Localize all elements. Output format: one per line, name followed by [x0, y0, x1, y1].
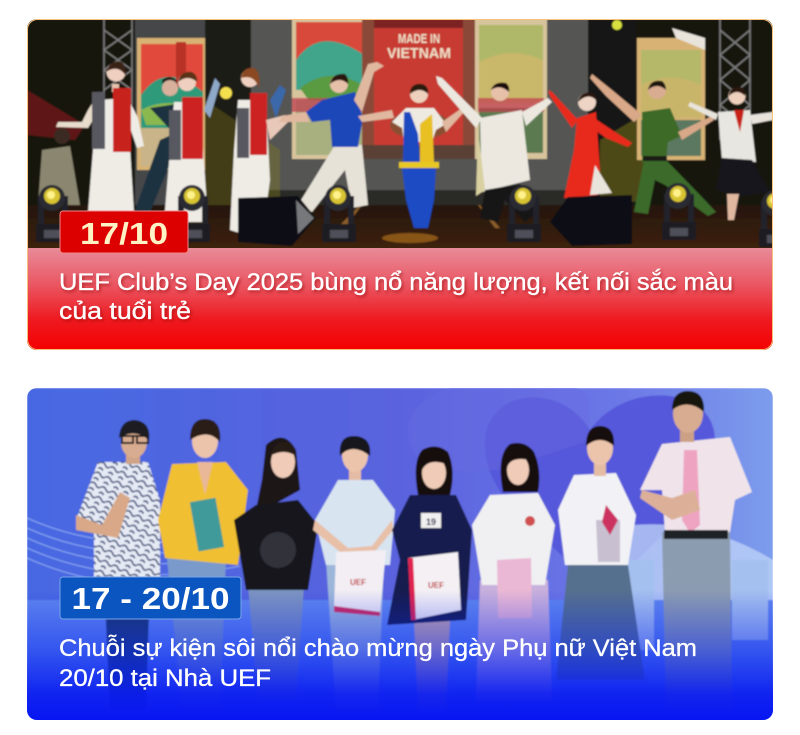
dancer green uniform [590, 74, 716, 216]
person 5: UEF [428, 581, 444, 590]
stage person left [38, 128, 80, 205]
dancer blue shirt [279, 62, 384, 212]
dancer student [688, 87, 773, 220]
person 8 [640, 391, 752, 710]
person 1 [76, 420, 160, 710]
title: card 2: 20/10 tại Nhà UEF [59, 665, 271, 692]
date badge: 17/10 [60, 211, 188, 253]
date badge: 17/10: 17/10 [80, 216, 168, 251]
truss towers [104, 19, 750, 140]
person 6 [472, 443, 555, 700]
gradient band [27, 248, 773, 350]
LED screen right [637, 28, 705, 160]
title: card 1: của tuổi trẻ [59, 298, 191, 325]
person 2 [158, 419, 248, 710]
title: card 1: UEF Club’s Day 2025 bùng nổ năng lượng, kết nối sắc màu [59, 269, 733, 296]
photo: group of women and hosts [27, 376, 773, 720]
panel: UEF Club's Day card [27, 19, 793, 350]
person 7 [556, 426, 645, 680]
dancer overalls [358, 84, 464, 228]
blue gradient overlay [27, 590, 773, 720]
title: card 1 [59, 269, 733, 325]
panel: Vietnamese Women's Day card [27, 376, 773, 720]
stage speakers [238, 195, 632, 246]
LED screen left [137, 38, 205, 170]
stage lights [36, 183, 793, 247]
photo: stage performance [27, 19, 793, 350]
person 5: 19 [426, 517, 436, 527]
title: card 2 [59, 635, 697, 692]
date badge: 17 - 20/10: 17 - 20/10 [72, 581, 230, 616]
person 5 [387, 446, 472, 710]
stage floor [27, 205, 773, 350]
date badge: 17 - 20/10 [60, 577, 241, 619]
person 4 [313, 436, 395, 710]
dancer red ao dai [548, 90, 632, 198]
dancer white coat [436, 76, 552, 222]
person 4: UEF [350, 578, 366, 587]
LED screen centre [292, 19, 547, 159]
LED screen centre: VIETNAM [387, 45, 451, 62]
title: card 2: Chuỗi sự kiện sôi nổi chào mừng ngày Phụ nữ Việt Nam [59, 635, 697, 662]
singers [56, 61, 290, 240]
heart backdrop [486, 395, 716, 558]
person 3 [234, 438, 318, 700]
backdrop text: MADE IN [398, 31, 440, 46]
